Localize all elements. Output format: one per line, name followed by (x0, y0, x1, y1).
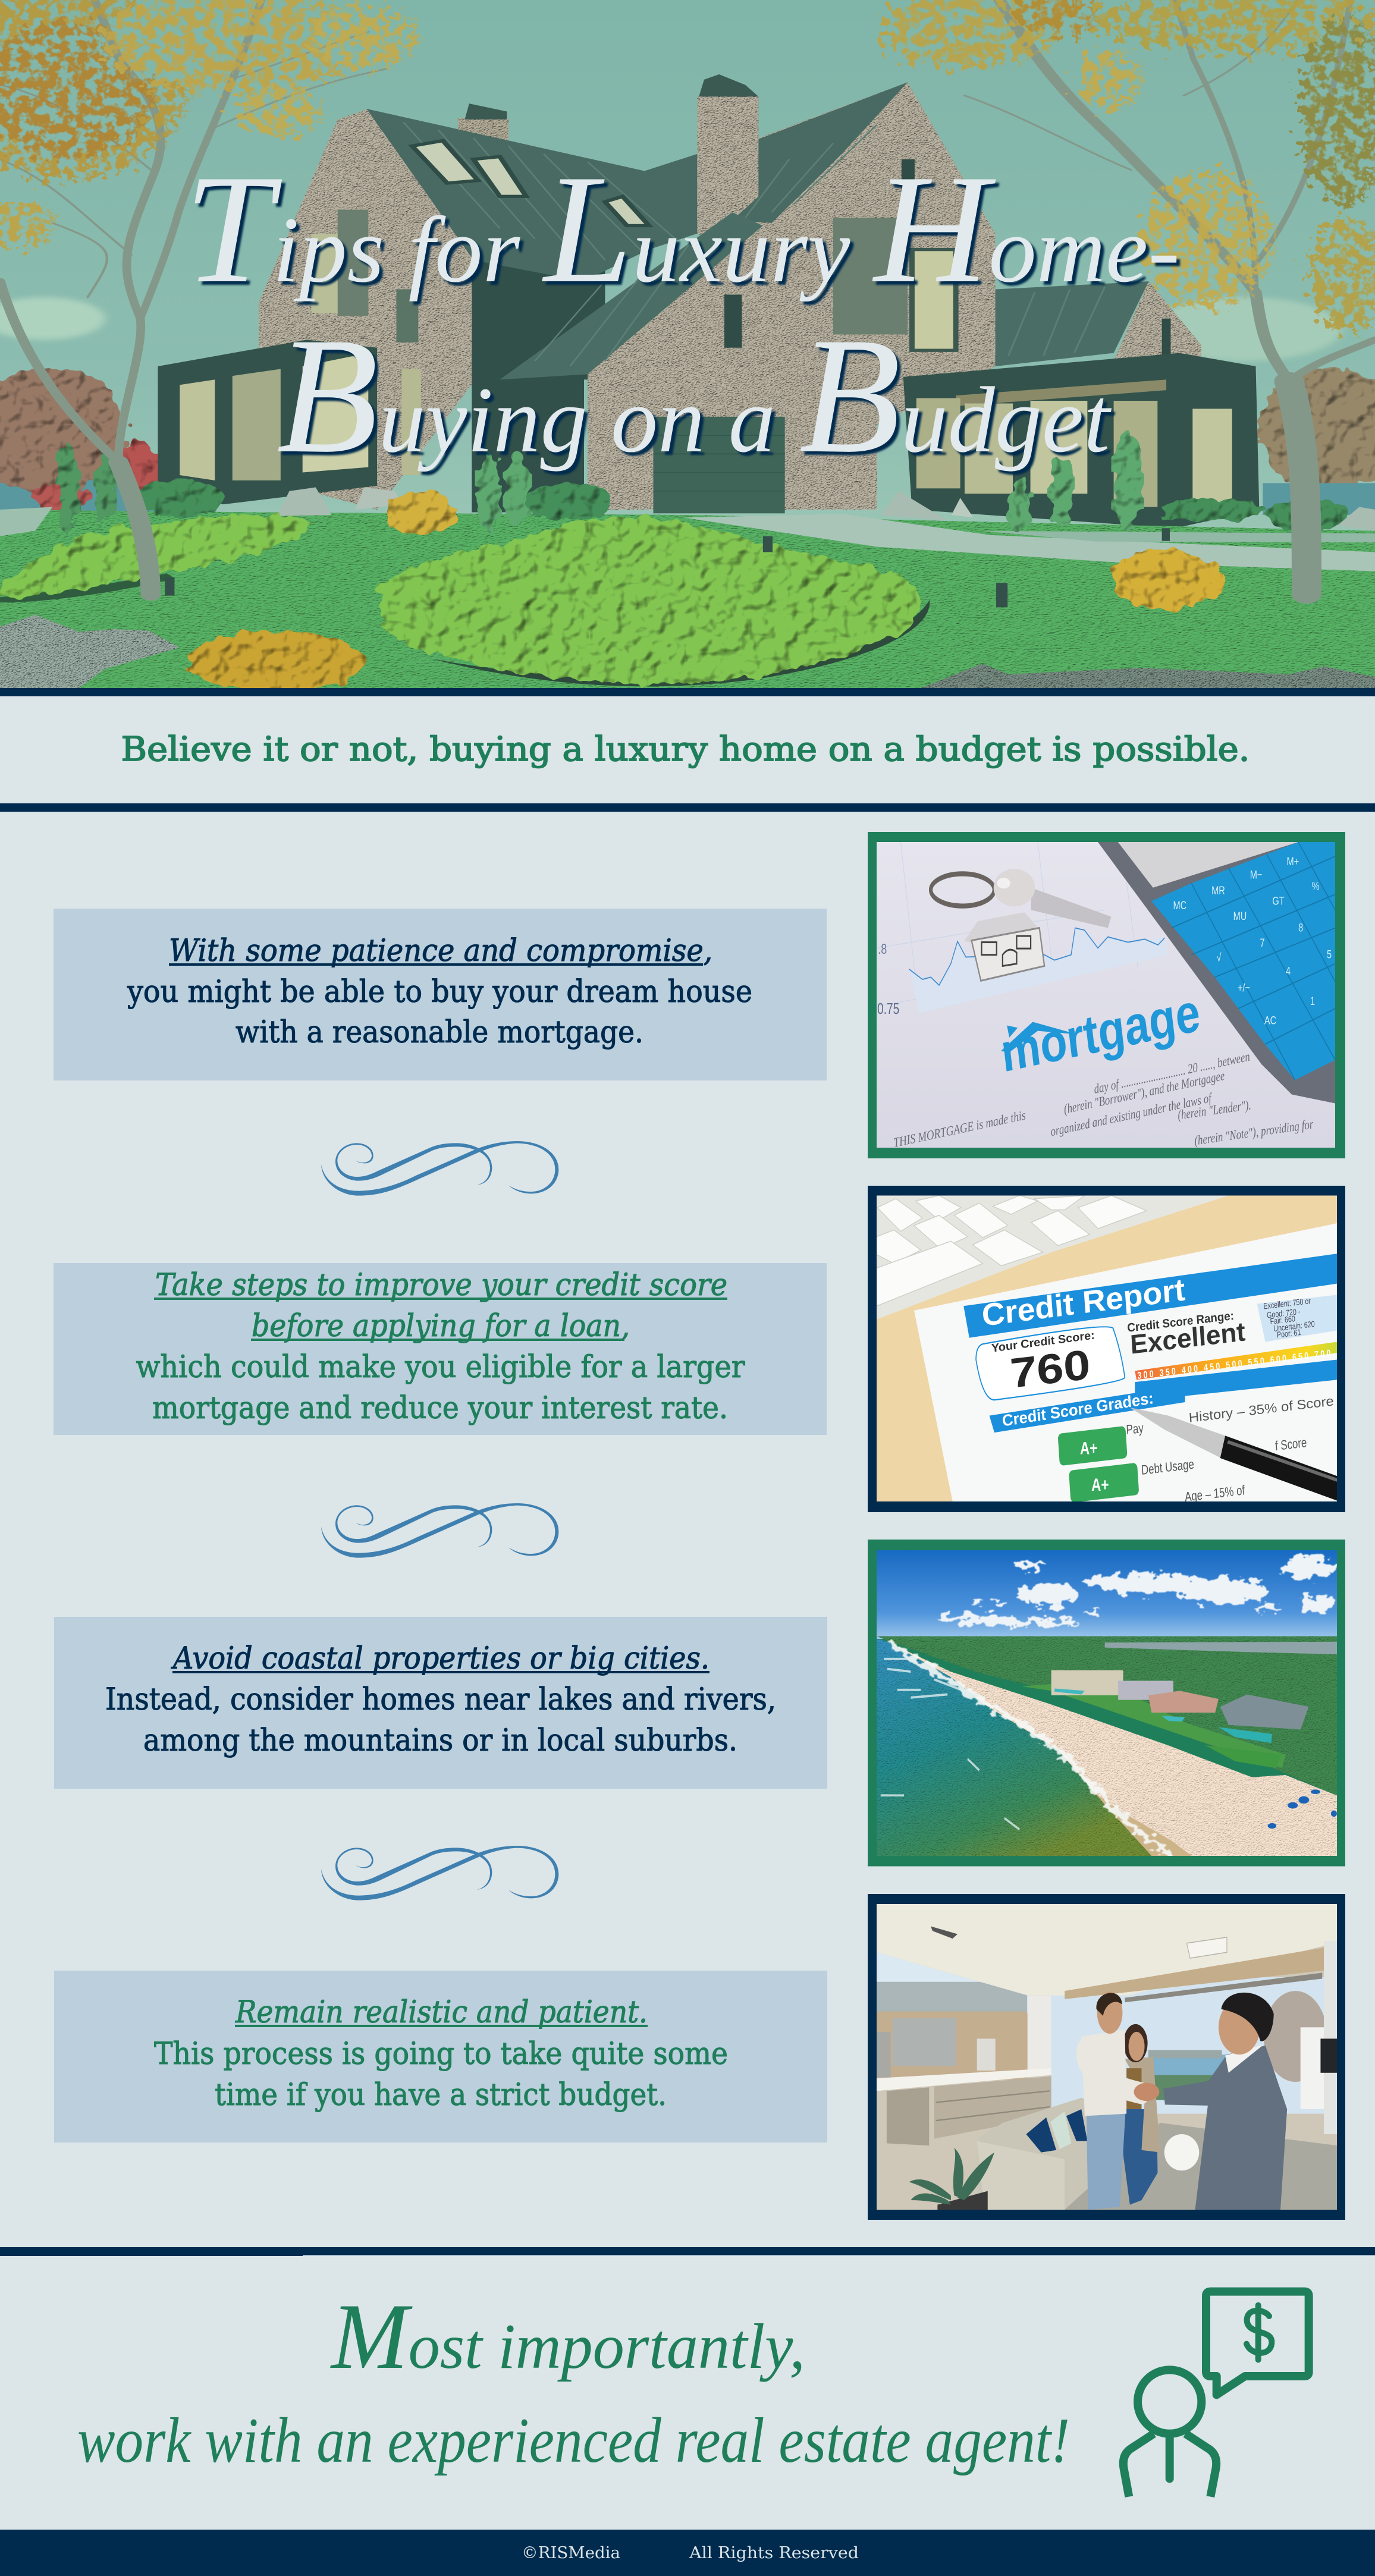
calculator: 5 (1327, 948, 1332, 961)
footer bar: All Rights Reserved (689, 2544, 859, 2562)
panel: tip 1 patience and compromise (54, 909, 827, 1080)
roofs (366, 109, 697, 281)
calculator: % (1312, 879, 1320, 893)
bottom divider bar (0, 2247, 1375, 2256)
calculator: +/− (1238, 981, 1250, 994)
photo: mortgage document, keys and calculator: .8 (878, 941, 887, 957)
photo: credit report, keyboard and pen: Credit Report (981, 1272, 1186, 1333)
photo: credit report, keyboard and pen: Credit Score Range: (1127, 1309, 1234, 1334)
panel: tip 2 credit score: which could make you eligible for a larger (136, 1350, 745, 1385)
A+ grade badges: A+ (1080, 1438, 1097, 1458)
photo: credit report, keyboard and pen: Fair: 660 (1270, 1314, 1295, 1327)
document lines: organized and existing under the laws of (1050, 1091, 1213, 1139)
mortgage logo: mortgage (998, 982, 1203, 1084)
title: Buying on a Budget (277, 303, 1112, 488)
calculator (1098, 842, 1335, 1103)
top divider bars (0, 688, 1375, 812)
photo: mortgage document, keys and calculator (877, 842, 1335, 1151)
panel: tip 4 realistic and patient (54, 1971, 827, 2143)
rug and table (1065, 2123, 1337, 2210)
garden lights (165, 528, 1170, 607)
calculator: MU (1233, 909, 1247, 922)
document lines: THIS MORTGAGE is made this (893, 1108, 1026, 1151)
calculator: 8 (1298, 921, 1303, 934)
agent in grey suit (1134, 1993, 1287, 2210)
photo: agent shaking hands with couple in a luxury home (877, 1904, 1337, 2210)
photo frame: credit report (868, 1186, 1345, 1512)
autumn foliage (0, 0, 1375, 334)
sofa and cushions (977, 2098, 1125, 2210)
title (184, 143, 1180, 488)
panel: tip 4 realistic and patient: This process is going to take quite some (154, 2037, 728, 2072)
calculator: 7 (1260, 936, 1265, 950)
photo: credit report, keyboard and pen (877, 1195, 1337, 1505)
photo: credit report, keyboard and pen: Poor: 61 (1277, 1328, 1301, 1340)
panel: tip 1 patience and compromise: with a reasonable mortgage. (236, 1015, 643, 1050)
tree trunks and branches (0, 0, 1375, 595)
photo: credit report, keyboard and pen: Excellent (1129, 1317, 1246, 1360)
right pavilion (903, 353, 1259, 528)
footer bar: ©RISMedia (522, 2544, 620, 2562)
photo frame: agent handshake (868, 1894, 1345, 2220)
photo: credit report, keyboard and pen: Good: 720 - (1267, 1307, 1301, 1320)
panel: tip 1 patience and compromise: With some patience and compromise, (169, 934, 712, 969)
document lines (893, 1049, 1314, 1151)
pen (1130, 1408, 1337, 1500)
ceiling (877, 1904, 1337, 1996)
icon: swirl divider 1 (321, 1141, 558, 1196)
panel: tip 3 location: among the mountains or in local suburbs. (143, 1723, 737, 1758)
sea (877, 1638, 1151, 1856)
panel: tip 3 location: Instead, consider homes near lakes and rivers, (105, 1682, 776, 1717)
woman (1123, 2024, 1160, 2205)
mansions and pools (1051, 1670, 1309, 1768)
photo: credit report, keyboard and pen: Your Credit Score: (991, 1328, 1095, 1355)
panel: tip 4 realistic and patient: time if you have a strict budget. (215, 2078, 667, 2113)
photo: credit report, keyboard and pen: Credit Score Grades: (1002, 1389, 1154, 1430)
calculator: M+ (1287, 855, 1299, 868)
panel: tip 2 credit score: before applying for a loan, (252, 1309, 630, 1344)
document lines: (herein "Lender"). (1177, 1098, 1252, 1123)
panel: tip 4 realistic and patient: Remain realistic and patient. (235, 1995, 648, 2030)
panel: tip 3 location (54, 1617, 827, 1789)
document lines: (herein "Borrower"), and the Mortgagee (1063, 1068, 1226, 1117)
icon: agent with dollar speech bubble (1123, 2292, 1309, 2497)
cypress, shrubs, rocks (57, 441, 80, 536)
calculator: √ (1217, 951, 1222, 964)
photo: credit report, keyboard and pen: 760 (1009, 1341, 1092, 1397)
panel: tip 3 location: Avoid coastal properties or big cities. (171, 1641, 710, 1676)
facade windows (338, 210, 368, 316)
left pavilion (158, 340, 377, 504)
kitchen island (877, 2068, 1051, 2145)
photo: credit report, keyboard and pen: History – 35% of Score (1188, 1394, 1335, 1426)
calculator: 4 (1286, 964, 1291, 978)
photo: credit report, keyboard and pen: Uncertain: 620 (1273, 1320, 1315, 1334)
right wall (1301, 2027, 1324, 2109)
beach (887, 1642, 1337, 1856)
title: Tips for Luxury Home- (184, 143, 1180, 315)
photo: credit report, keyboard and pen: f Score (1274, 1435, 1307, 1454)
panel: tip 2 credit score (54, 1263, 827, 1435)
panel: tip 2 credit score: mortgage and reduce your interest rate. (152, 1391, 728, 1426)
photo: credit report, keyboard and pen: Excellent: 750 or (1263, 1296, 1311, 1311)
photo: credit report, keyboard and pen: Age – 15% of (1184, 1483, 1245, 1505)
key and house charm (931, 869, 1111, 981)
lawn and driveway (0, 510, 1375, 688)
calculator: AC (1264, 1013, 1276, 1027)
icon: swirl divider 3 (321, 1846, 558, 1900)
document lines: day of .......................... 20 ....., between (1093, 1049, 1251, 1097)
calculator: MR (1211, 884, 1225, 897)
plant (909, 2148, 994, 2210)
calculator: 1 (1310, 994, 1315, 1007)
closing message: work with an experienced real estate agent! (77, 2405, 1070, 2476)
calculator: M− (1250, 868, 1262, 881)
photo: aerial view of coastal mansions (877, 1550, 1337, 1856)
panel: tip 1 patience and compromise: you might be able to buy your dream house (127, 975, 752, 1010)
footer bar (0, 2530, 1375, 2576)
calculator: GT (1272, 894, 1285, 907)
beach umbrellas (1268, 1789, 1337, 1829)
panel: tip 2 credit score: Take steps to improve your credit score (155, 1268, 727, 1303)
photo frame: beach (868, 1540, 1345, 1866)
calculator: MC (1173, 899, 1186, 912)
icon: swirl divider 2 (321, 1503, 558, 1558)
house walls (259, 109, 473, 510)
closing message: Most importantly, (330, 2285, 805, 2389)
hero photo: luxury house with autumn trees (0, 0, 1375, 688)
A+ grade badges (1057, 1426, 1139, 1503)
photo: credit report, keyboard and pen: Debt Usage (1141, 1457, 1195, 1478)
photo: mortgage document, keys and calculator: 0.75 (877, 1000, 899, 1017)
A+ grade badges: A+ (1091, 1475, 1109, 1495)
photo: credit report, keyboard and pen: Pay (1126, 1421, 1144, 1438)
closing message (77, 2285, 1070, 2476)
photo: credit report, keyboard and pen: 300 350 400 450 500 550 600 650 700 (1137, 1348, 1331, 1381)
photo frame: mortgage (868, 832, 1345, 1158)
subtitle banner: Believe it or not, buying a luxury home on a budget is possible. (121, 730, 1250, 769)
man in white sweater (1081, 1992, 1142, 2210)
garage door (653, 417, 785, 513)
document lines: (herein "Note"), providing for (1194, 1117, 1314, 1148)
